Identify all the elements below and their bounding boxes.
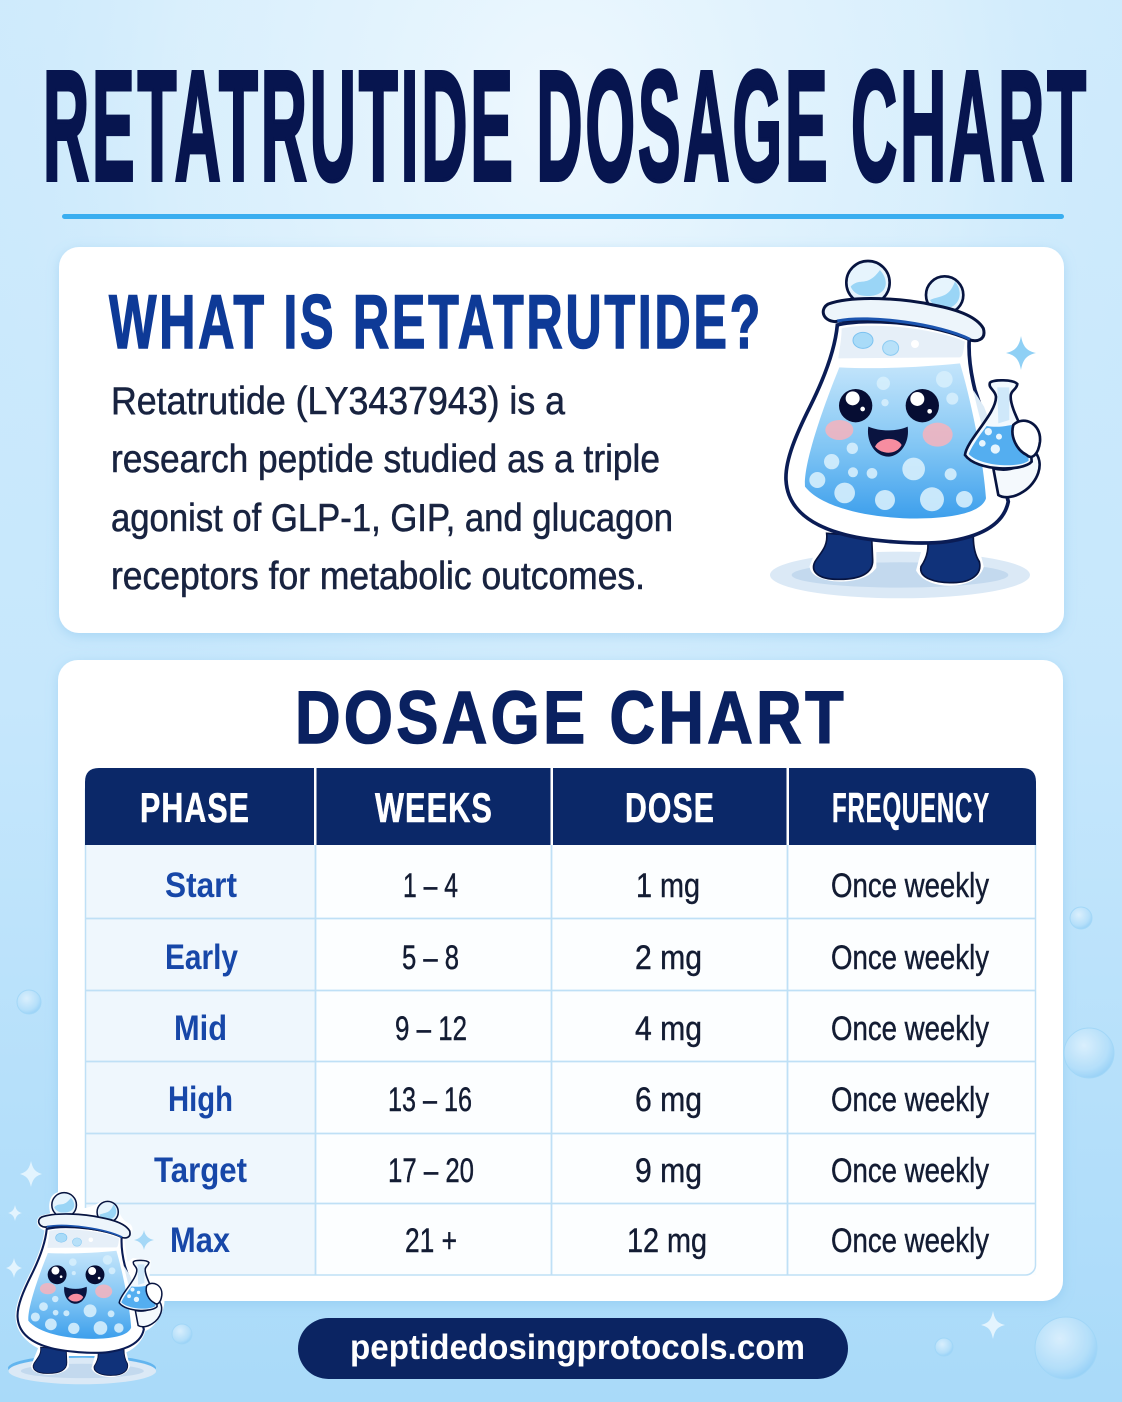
row: mid: Once weekly <box>831 1010 989 1048</box>
row: mid <box>174 1009 989 1048</box>
row: early: Once weekly <box>831 939 989 977</box>
title underline <box>62 214 1064 219</box>
row: mid: 9 – 12 <box>395 1010 467 1048</box>
heading: what is retatrutide: WHAT IS RETATRUTIDE? <box>109 280 763 365</box>
table header: FREQUENCY <box>832 784 990 831</box>
decorative sparkles <box>6 1161 1005 1339</box>
table header: DOSE <box>625 784 715 831</box>
icon: sparkle <box>1006 336 1036 370</box>
website pill: peptidedosingprotocols.com <box>350 1328 805 1367</box>
website pill <box>298 1318 848 1379</box>
row: start: Once weekly <box>831 867 989 905</box>
table header: WEEKS <box>375 784 493 831</box>
row: high: 6 mg <box>635 1081 702 1119</box>
panel: dosage chart <box>58 660 1063 1301</box>
row: target: Target <box>154 1151 247 1190</box>
icon: small flask mascot <box>8 1193 162 1384</box>
row: early: 5 – 8 <box>402 939 459 977</box>
row: high: High <box>168 1080 233 1119</box>
description text: agonist of GLP-1, GIP, and glucagon <box>111 497 673 540</box>
description text: Retatrutide (LY3437943) is a <box>111 380 565 423</box>
row: target: 17 – 20 <box>388 1152 474 1190</box>
row: high: Once weekly <box>831 1081 989 1119</box>
table header: PHASE <box>140 784 250 831</box>
panel: what is retatrutide <box>59 247 1064 633</box>
description text: receptors for metabolic outcomes. <box>111 555 645 598</box>
row: early: Early <box>165 938 238 977</box>
description text: research peptide studied as a triple <box>111 438 660 481</box>
row: start: Start <box>165 866 237 905</box>
row: max: 12 mg <box>627 1222 707 1260</box>
table header <box>85 768 1036 845</box>
row: max <box>170 1221 989 1260</box>
row: target <box>154 1151 989 1190</box>
row: start <box>165 866 989 905</box>
row: max: 21 + <box>405 1222 457 1260</box>
row: max: Max <box>170 1221 230 1260</box>
row: early: 2 mg <box>635 939 702 977</box>
row: mid: Mid <box>174 1009 227 1048</box>
description text <box>111 380 673 598</box>
row: high: 13 – 16 <box>388 1081 472 1119</box>
heading: dosage chart: DOSAGE CHART <box>295 676 847 759</box>
row: start: 1 – 4 <box>403 867 458 905</box>
row: target: Once weekly <box>831 1152 989 1190</box>
icon: flask mascot <box>770 261 1041 598</box>
row: max: Once weekly <box>831 1222 989 1260</box>
row: high <box>168 1080 989 1119</box>
decorative bubbles <box>17 907 1114 1379</box>
dosage table <box>85 768 1036 1275</box>
row: mid: 4 mg <box>635 1010 702 1048</box>
row: start: 1 mg <box>636 867 700 905</box>
row: early <box>165 938 989 977</box>
row: target: 9 mg <box>635 1152 702 1190</box>
